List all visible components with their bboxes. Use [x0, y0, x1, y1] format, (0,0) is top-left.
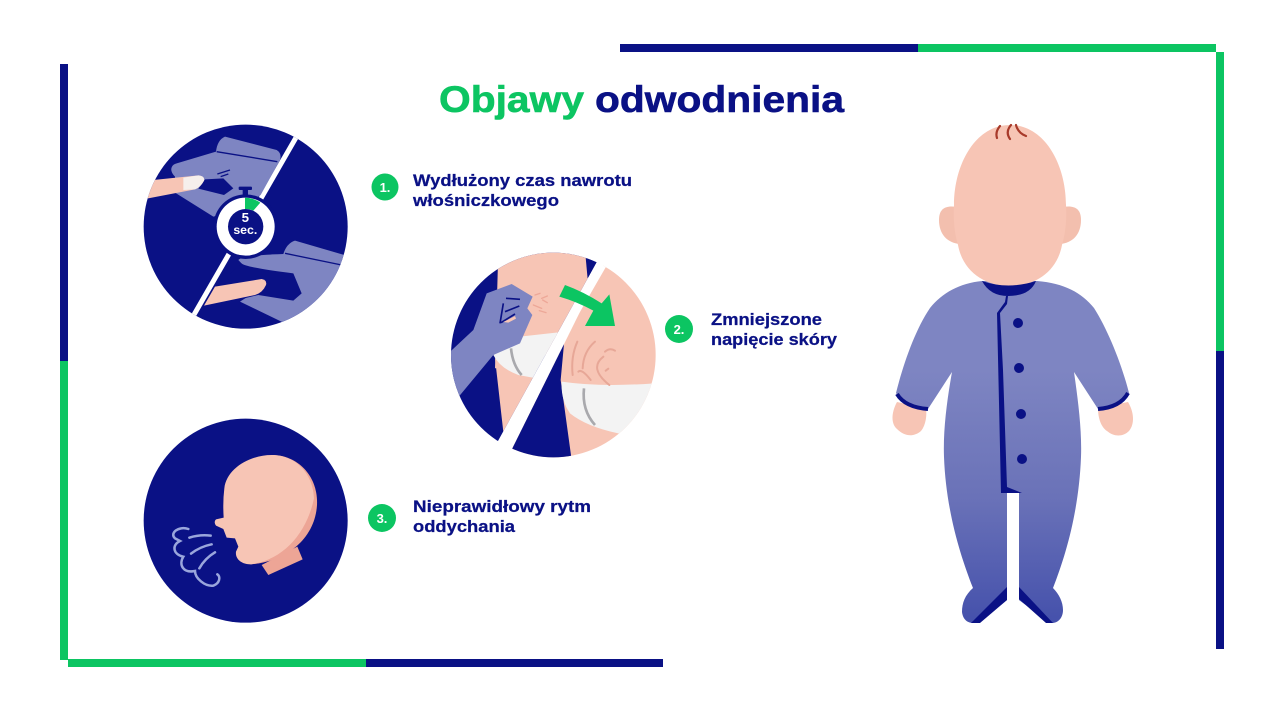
step 3 label: oddychania: [413, 518, 516, 536]
title: odwodnienia: [595, 79, 844, 120]
icon: pale fingertip: [143, 175, 204, 199]
step 1 label: włośniczkowego: [412, 192, 559, 210]
icon: head: [215, 455, 314, 564]
illustration: skin turgor: [451, 252, 656, 458]
icon: stopwatch: 5: [242, 210, 250, 225]
step 3 label: Nieprawidłowy rytm: [413, 498, 591, 516]
icon: head: [954, 125, 1066, 286]
arrow: green: [559, 285, 615, 326]
step 2 label: [665, 311, 838, 349]
icon: ears: [939, 207, 1081, 244]
icon: head shade: [251, 455, 317, 564]
icon: hair: [996, 125, 1026, 139]
icon: hands: [892, 402, 1133, 436]
icon: upper finger press gap: [198, 178, 233, 195]
step 1 label: Wydłużony czas nawrotu: [413, 172, 632, 190]
icon: pink fingertip: [204, 279, 266, 306]
icon: collar: [982, 281, 1036, 296]
icon: stopwatch: sec.: [233, 224, 257, 237]
icon: stopwatch: [213, 187, 278, 259]
icon: pinching hand: [447, 284, 533, 396]
illustration: breathing: [144, 419, 348, 623]
icon: neck: [262, 547, 303, 575]
stripe: diagonal separator: [579, 266, 606, 314]
right half: skin fold: [512, 266, 656, 458]
icon: placket: [997, 296, 1022, 493]
title: Objawy: [439, 79, 584, 120]
illustration: capillary refill: [143, 125, 350, 329]
step 3 label: [368, 498, 591, 536]
step 3 label: 3.: [377, 511, 387, 526]
icon: wrinkles: [572, 342, 615, 385]
step 2 label: 2.: [674, 322, 684, 337]
baby figure: [892, 125, 1133, 623]
step 1 label: 1.: [380, 180, 390, 195]
title: [439, 79, 844, 120]
icon: lower hand: [238, 241, 350, 323]
step 2 label: Zmniejszone: [711, 311, 822, 329]
step 2 label: napięcie skóry: [711, 331, 838, 349]
stripe: diagonal separator: [190, 131, 300, 322]
icon: foot soles: [971, 587, 1053, 623]
icon: lower finger press gap: [242, 263, 302, 301]
icon: buttons: [1013, 318, 1027, 464]
icon: breath cloud: [173, 528, 219, 586]
sleepsuit: [896, 281, 1129, 623]
decorative frame: [60, 44, 1224, 667]
icon: upper hand: [171, 137, 281, 217]
step 1 label: [372, 172, 632, 210]
icon: skin pinch marks: [533, 293, 547, 313]
icon: cuffs: [897, 393, 1128, 409]
left half: pinched skin: [451, 252, 597, 441]
